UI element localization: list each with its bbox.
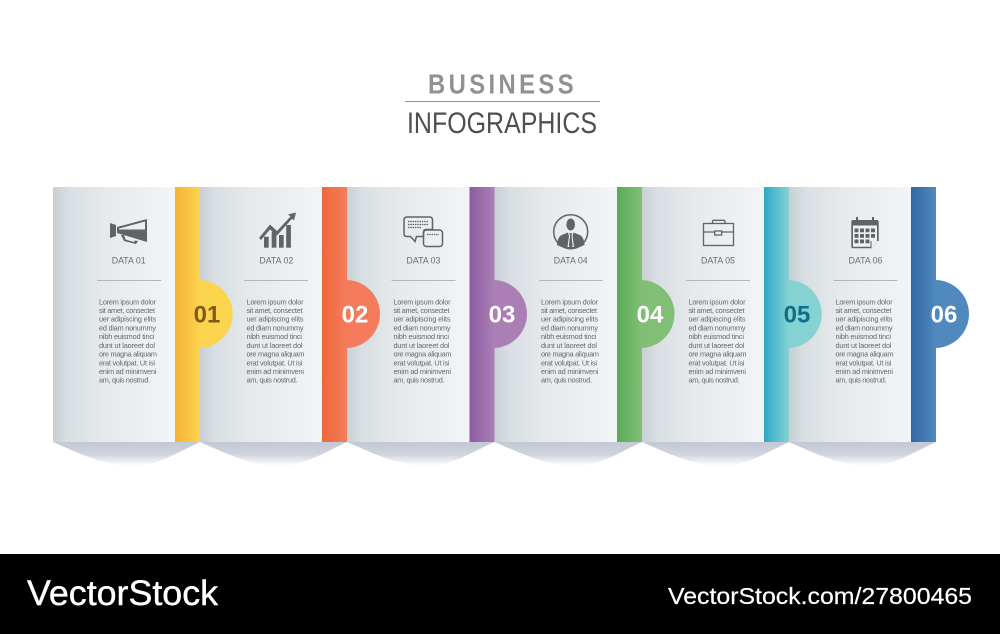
text block: dunt ut laoreet dol bbox=[836, 341, 892, 350]
text block: sit amet, consectet bbox=[394, 306, 450, 315]
text block: sit amet, consectet bbox=[246, 306, 302, 315]
icon: businessman bbox=[554, 215, 588, 249]
text block: nibh euismod tinci bbox=[688, 332, 744, 341]
icon: briefcase bbox=[704, 220, 734, 246]
text block: uer adipiscing elits bbox=[836, 315, 893, 324]
title bbox=[405, 68, 600, 140]
text block: erat volutpat. Ut isi bbox=[836, 358, 892, 367]
text block: erat volutpat. Ut isi bbox=[394, 358, 450, 367]
tab 06 bbox=[911, 187, 969, 442]
icon: speech bubbles bbox=[404, 217, 442, 246]
icon: calendar bbox=[851, 217, 879, 248]
text block: erat volutpat. Ut isi bbox=[541, 358, 597, 367]
text block: ore magna aliquam bbox=[394, 350, 452, 359]
panel 01 bbox=[53, 187, 175, 442]
text block: am, quis nostrud. bbox=[246, 376, 298, 385]
text block: ed diam nonummy bbox=[246, 323, 304, 332]
text block: enim ad minimveni bbox=[394, 367, 451, 376]
text block: dunt ut laoreet dol bbox=[246, 341, 303, 350]
text block: ore magna aliquam bbox=[836, 350, 894, 359]
panel 04 bbox=[494, 187, 617, 442]
tab 02 bbox=[322, 187, 380, 442]
tab 01 bbox=[175, 187, 233, 442]
text block: erat volutpat. Ut isi bbox=[246, 358, 303, 367]
text block: am, quis nostrud. bbox=[688, 376, 740, 385]
text block: am, quis nostrud. bbox=[99, 376, 150, 385]
text block: sit amet, consectet bbox=[688, 306, 744, 315]
text block: Lorem ipsum dolor bbox=[99, 297, 157, 306]
text block: uer adipiscing elits bbox=[394, 315, 451, 324]
text block: ore magna aliquam bbox=[541, 350, 599, 359]
footer logo: VectorStock bbox=[27, 574, 219, 613]
tab 04: 04 bbox=[637, 302, 664, 328]
text block: enim ad minimveni bbox=[688, 367, 746, 376]
text block: Lorem ipsum dolor bbox=[688, 297, 746, 306]
text block: nibh euismod tinci bbox=[246, 332, 302, 341]
text block: sit amet, consectet bbox=[99, 306, 155, 315]
tab 01: 01 bbox=[194, 302, 220, 328]
tab 05: 05 bbox=[784, 302, 810, 328]
text block: erat volutpat. Ut isi bbox=[99, 358, 155, 367]
tab 03: 03 bbox=[489, 302, 515, 328]
text block: ed diam nonummy bbox=[836, 323, 893, 332]
text block: am, quis nostrud. bbox=[394, 376, 444, 385]
tab 04 bbox=[617, 187, 674, 442]
tab 05 bbox=[764, 187, 822, 442]
panel 02 bbox=[200, 187, 322, 442]
text block: ore magna aliquam bbox=[688, 350, 746, 359]
text block: enim ad minimveni bbox=[541, 367, 599, 376]
text block: uer adipiscing elits bbox=[541, 315, 598, 324]
text block: enim ad minimveni bbox=[836, 367, 893, 376]
text block: sit amet, consectet bbox=[541, 306, 597, 315]
text block: enim ad minimveni bbox=[246, 367, 304, 376]
text block: ed diam nonummy bbox=[394, 323, 451, 332]
label: DATA 02 bbox=[259, 256, 293, 266]
text block: Lorem ipsum dolor bbox=[246, 297, 304, 306]
panel 03 bbox=[347, 187, 470, 442]
text block: ed diam nonummy bbox=[541, 323, 598, 332]
text block: erat volutpat. Ut isi bbox=[688, 358, 745, 367]
panel 05 bbox=[642, 187, 764, 442]
title: business: BUSINESS bbox=[428, 68, 577, 100]
text block: nibh euismod tinci bbox=[541, 332, 597, 341]
text block: ed diam nonummy bbox=[99, 323, 156, 332]
text block: dunt ut laoreet dol bbox=[541, 341, 597, 350]
label: DATA 01 bbox=[112, 256, 146, 266]
text block: ed diam nonummy bbox=[688, 323, 746, 332]
text block: Lorem ipsum dolor bbox=[394, 297, 451, 306]
text block: dunt ut laoreet dol bbox=[688, 341, 745, 350]
tab 02: 02 bbox=[342, 302, 368, 328]
icon: megaphone bbox=[110, 219, 147, 244]
footer url: VectorStock.com/27800465 bbox=[668, 583, 972, 609]
shadows under panels bbox=[53, 442, 936, 466]
panel 06 bbox=[789, 187, 911, 442]
label: DATA 06 bbox=[849, 256, 883, 266]
text block: ore magna aliquam bbox=[99, 350, 157, 359]
text block: sit amet, consectet bbox=[836, 306, 892, 315]
icon: growth chart bbox=[259, 212, 296, 248]
text block: uer adipiscing elits bbox=[688, 315, 746, 324]
label: DATA 05 bbox=[701, 256, 735, 266]
text block: am, quis nostrud. bbox=[541, 376, 592, 385]
text block: Lorem ipsum dolor bbox=[836, 297, 893, 306]
text block: Lorem ipsum dolor bbox=[541, 297, 599, 306]
label: DATA 03 bbox=[407, 256, 441, 266]
tab 03 bbox=[470, 187, 527, 442]
text block: nibh euismod tinci bbox=[394, 332, 449, 341]
label: DATA 04 bbox=[554, 256, 588, 266]
footer bar bbox=[0, 554, 1000, 634]
text block: dunt ut laoreet dol bbox=[394, 341, 450, 350]
text block: uer adipiscing elits bbox=[246, 315, 304, 324]
title: infographics: INFOGRAPHICS bbox=[407, 107, 597, 140]
text block: nibh euismod tinci bbox=[99, 332, 155, 341]
text block: dunt ut laoreet dol bbox=[99, 341, 155, 350]
text block: enim ad minimveni bbox=[99, 367, 157, 376]
text block: nibh euismod tinci bbox=[836, 332, 891, 341]
text block: am, quis nostrud. bbox=[836, 376, 886, 385]
text block: ore magna aliquam bbox=[246, 350, 304, 359]
tab 06: 06 bbox=[931, 302, 957, 328]
text block: uer adipiscing elits bbox=[99, 315, 156, 324]
